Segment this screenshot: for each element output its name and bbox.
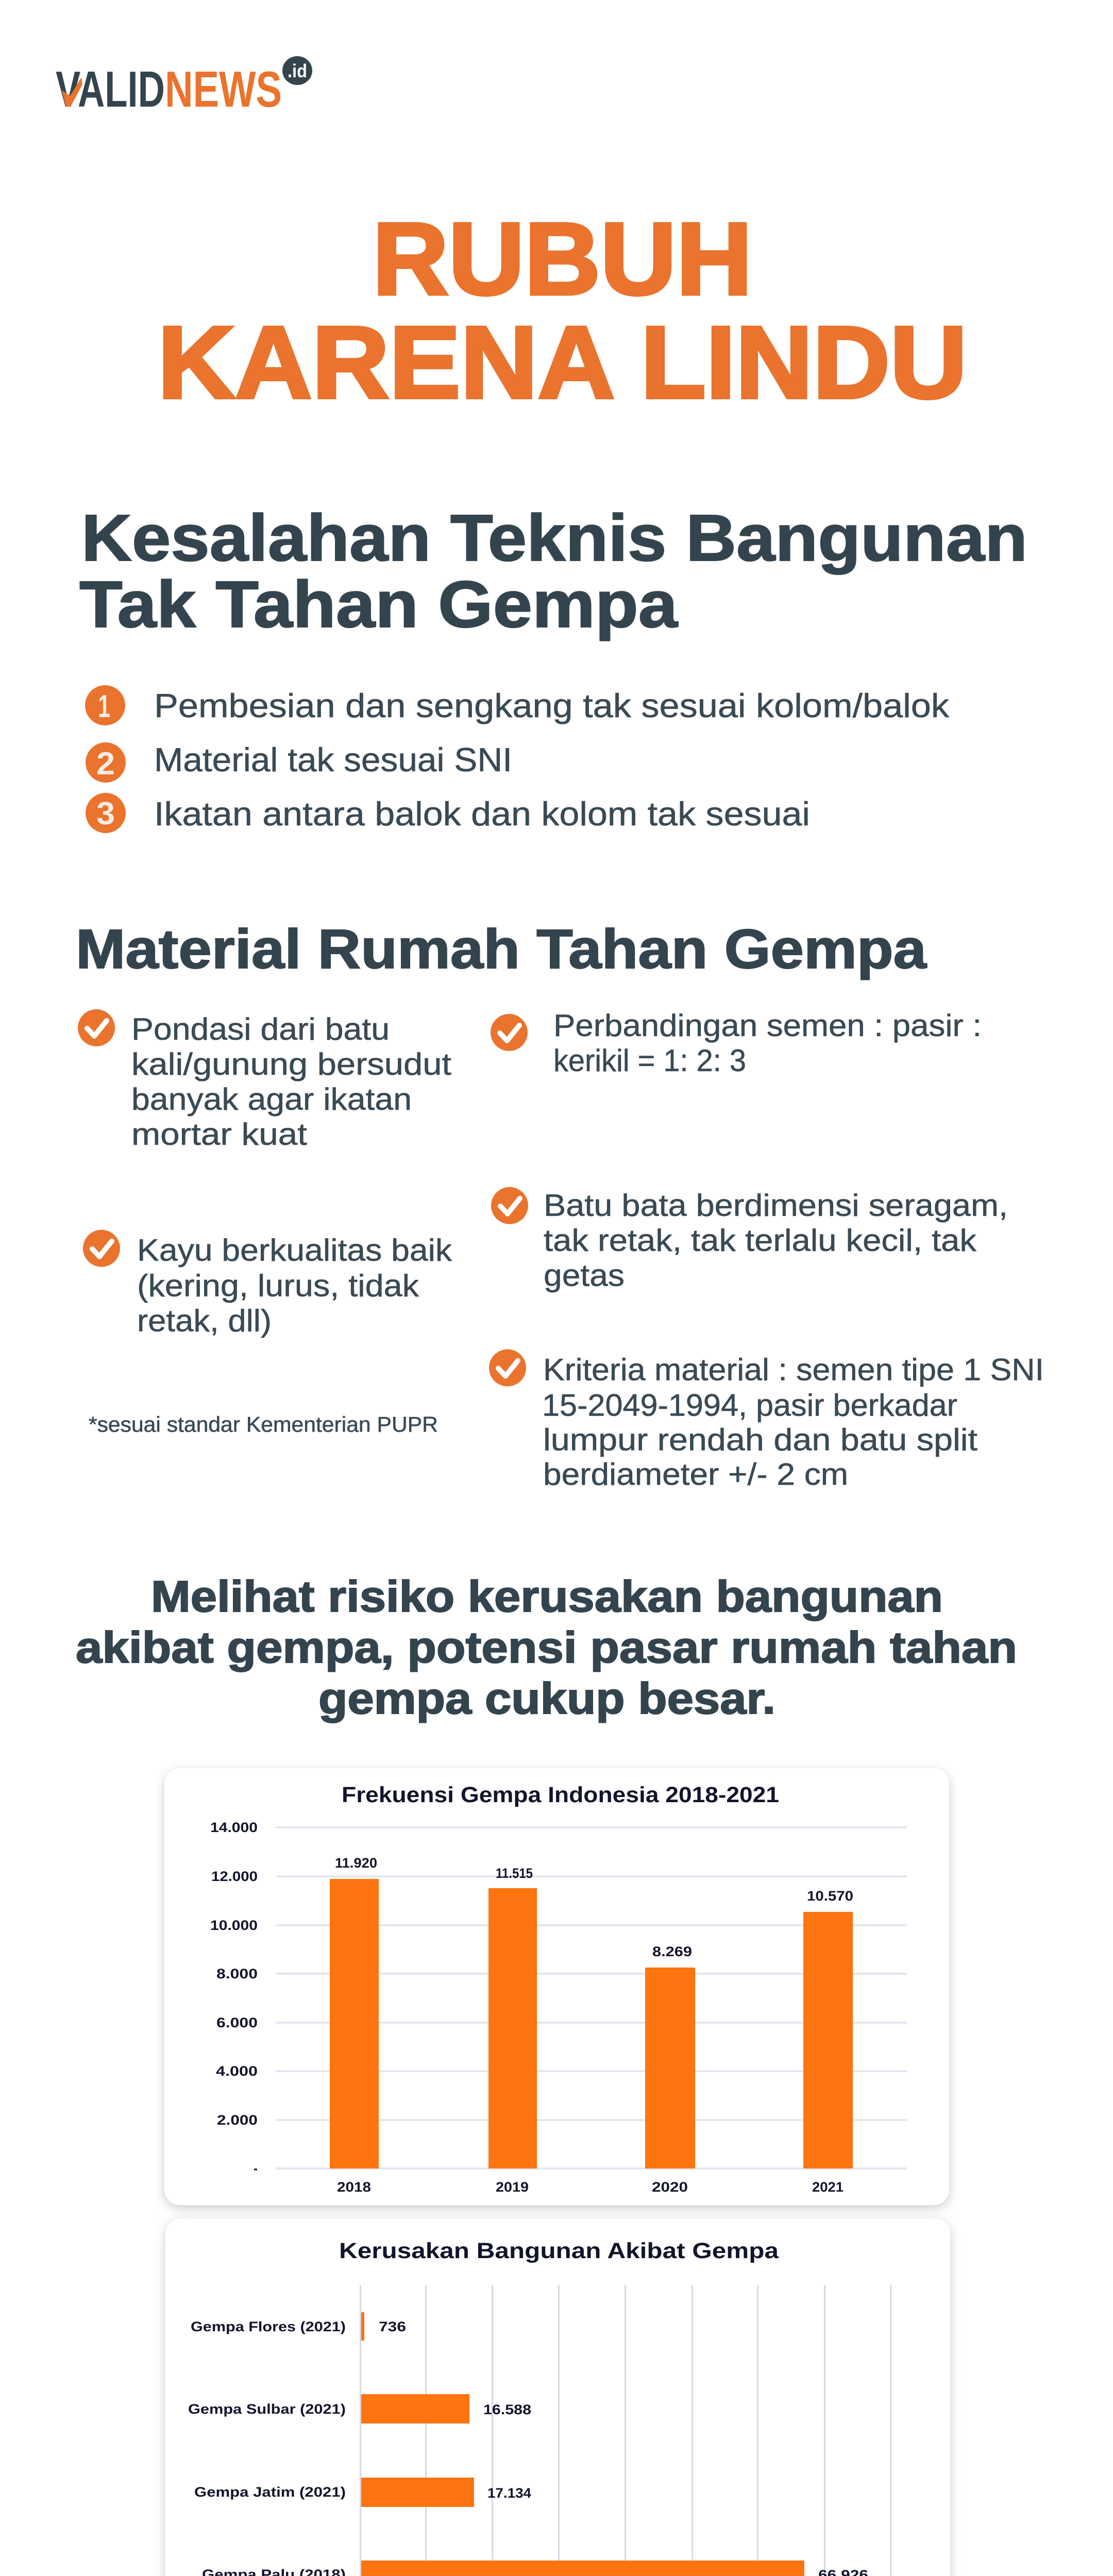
list item 3: 3 [96, 796, 115, 832]
category labels: Gempa Sulbar (2021) [188, 2401, 346, 2417]
item: perbandingan: kerikil = 1: 2: 3 [553, 1043, 746, 1078]
statement heading: gempa cukup besar. [318, 1674, 775, 1723]
statement heading [76, 1572, 1017, 1723]
bars [330, 1879, 853, 2168]
panel: chart frekuensi gempa [164, 1768, 949, 2205]
title [158, 202, 967, 420]
item: kriteria: lumpur rendah dan batu split [543, 1422, 977, 1457]
category labels [188, 2319, 346, 2576]
footnote: *sesuai standar Kementerian PUPR [89, 1412, 438, 1436]
y axis labels: - [254, 2161, 258, 2176]
logo: Validnews.id: VALID [56, 61, 165, 117]
panel: kesalahan teknis [79, 501, 1027, 833]
item: batu bata: getas [544, 1258, 625, 1293]
title: KARENA LINDU [158, 306, 967, 420]
list item 1: 1 [98, 689, 110, 724]
bar values [379, 2319, 868, 2576]
item: perbandingan [491, 1008, 982, 1078]
category labels: Gempa Jatim (2021) [194, 2484, 346, 2500]
item: kriteria: 15-2049-1994, pasir berkadar [542, 1388, 957, 1422]
bar values: 16.588 [483, 2402, 531, 2417]
heading: material: Material Rumah Tahan Gempa [76, 918, 927, 980]
item: kriteria: berdiameter +/- 2 cm [543, 1457, 848, 1492]
x axis labels: 2020 [652, 2179, 688, 2195]
y axis labels: 8.000 [216, 1966, 258, 1981]
y axis labels: 6.000 [216, 2015, 258, 2030]
y axis labels: 2.000 [217, 2112, 258, 2128]
list item 1: Pembesian dan sengkang tak sesuai kolom/balok [154, 687, 950, 724]
item: kayu: Kayu berkualitas baik [137, 1233, 452, 1267]
item: perbandingan: Perbandingan semen : pasir : [553, 1008, 982, 1043]
heading: kesalahan teknis: Tak Tahan Gempa [79, 568, 678, 641]
item: pondasi [78, 1009, 451, 1151]
item: kriteria: Kriteria material : semen tipe 1 SNI [543, 1352, 1044, 1387]
item: batu bata: Batu bata berdimensi seragam, [544, 1188, 1008, 1223]
bar values: 11.920 [335, 1855, 377, 1871]
x axis labels [337, 2179, 844, 2195]
list item 2: 2 [96, 746, 115, 782]
statement heading: akibat gempa, potensi pasar rumah tahan [76, 1623, 1017, 1672]
x axis labels: 2019 [496, 2179, 529, 2195]
panel: chart kerusakan bangunan [165, 2218, 950, 2576]
chart title: Frekuensi Gempa Indonesia 2018-2021 [342, 1783, 779, 1807]
x axis labels: 2018 [337, 2179, 371, 2195]
category labels: Gempa Flores (2021) [191, 2319, 346, 2334]
logo: Validnews.id [56, 56, 312, 117]
list item 2: Material tak sesuai SNI [154, 741, 512, 778]
y axis labels: 14.000 [210, 1820, 258, 1835]
item: batu bata: tak retak, tak terlalu kecil, tak [544, 1223, 977, 1258]
item: batu bata [491, 1187, 1008, 1293]
logo: Validnews.id: .id [288, 60, 307, 81]
logo: Validnews.id: NEWS [165, 61, 282, 117]
item: pondasi: banyak agar ikatan [131, 1082, 412, 1116]
heading: kesalahan teknis: Kesalahan Teknis Bangunan [81, 501, 1027, 575]
y axis labels: 4.000 [216, 2063, 258, 2079]
bar values [335, 1855, 853, 1959]
bar values: 8.269 [652, 1944, 692, 1959]
statement heading: Melihat risiko kerusakan bangunan [151, 1572, 943, 1621]
y axis labels [210, 1820, 258, 2176]
item: kriteria [489, 1349, 1044, 1492]
item: pondasi: mortar kuat [131, 1117, 307, 1151]
bar values: 11.515 [496, 1866, 533, 1881]
title: RUBUH [373, 202, 752, 316]
heading: kesalahan teknis [79, 501, 1027, 641]
item: kayu: retak, dll) [137, 1303, 272, 1338]
item: kayu: (kering, lurus, tidak [137, 1268, 419, 1303]
y axis labels: 10.000 [210, 1918, 258, 1933]
chart title: Kerusakan Bangunan Akibat Gempa [339, 2239, 779, 2263]
y axis labels: 12.000 [211, 1869, 258, 1884]
list item 3: Ikatan antara balok dan kolom tak sesuai [154, 795, 810, 833]
x axis labels: 2021 [812, 2179, 844, 2195]
panel: material rumah tahan gempa [76, 918, 1044, 1492]
item: pondasi: Pondasi dari batu [131, 1012, 390, 1046]
bars [361, 2312, 804, 2576]
bar values: 10.570 [807, 1888, 853, 1904]
item: pondasi: kali/gunung bersudut [131, 1047, 451, 1081]
bar values: 17.134 [487, 2485, 531, 2501]
bar values: 736 [379, 2319, 406, 2334]
item: kayu [83, 1230, 452, 1338]
